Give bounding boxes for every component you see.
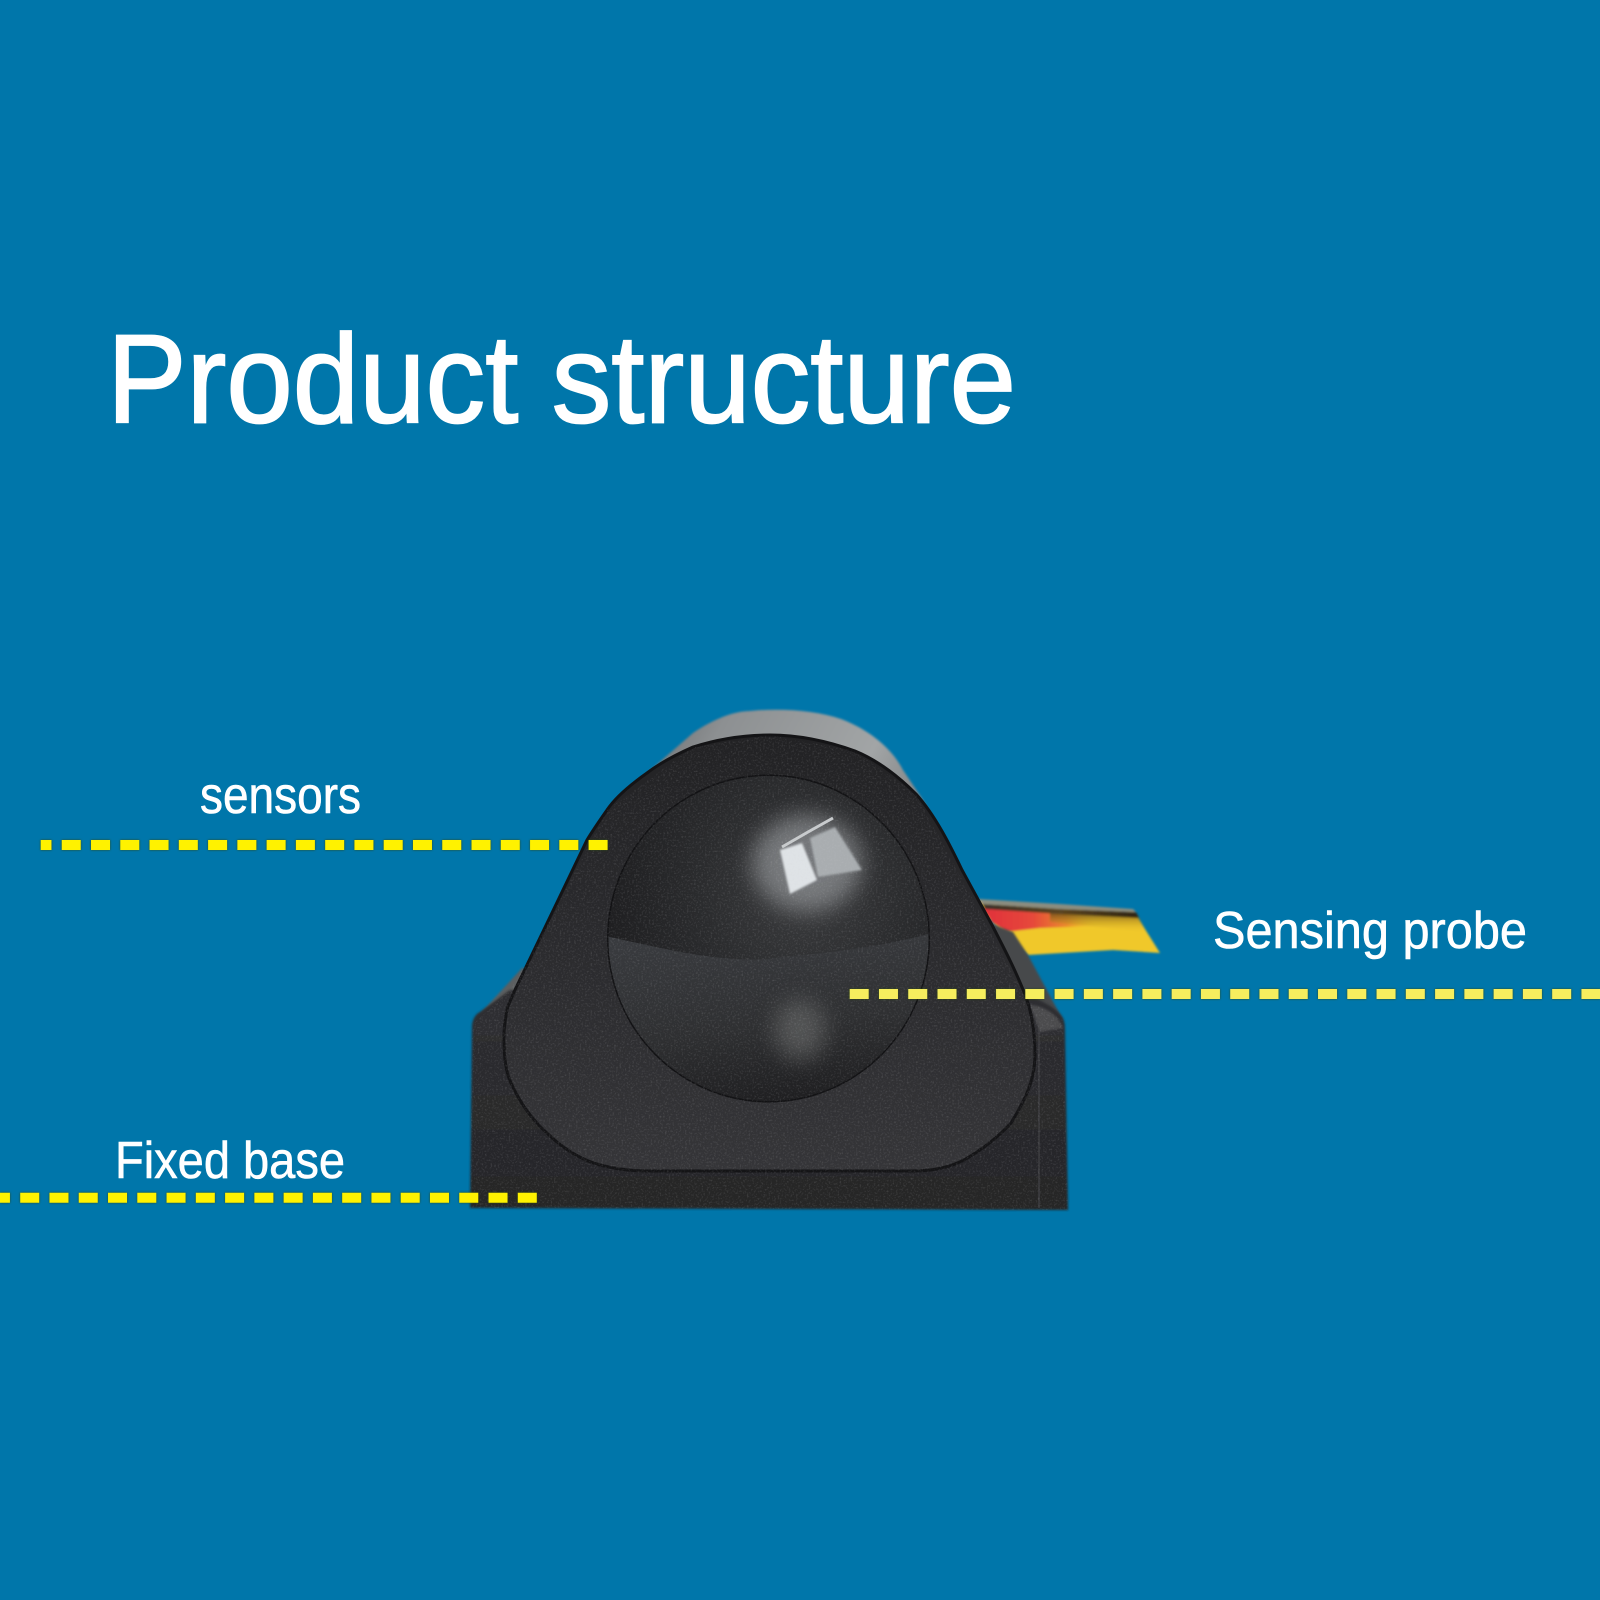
left shoulder: [477, 967, 535, 1030]
base top-right corner: [1030, 1005, 1063, 1032]
sensor dome: [600, 770, 940, 1110]
soft reflection: [774, 1000, 826, 1060]
product photo: sensor device: [470, 710, 1160, 1210]
wire bundle: [978, 899, 1160, 955]
callout line: fixed base: [0, 1193, 537, 1203]
rear housing: [607, 710, 985, 915]
callout line: sensing probe: [850, 989, 1600, 999]
label: sensing probe: Sensing probe: [1213, 902, 1527, 960]
callout line: sensors: [41, 840, 608, 850]
fixed base body: [470, 990, 1068, 1210]
right side panel: [975, 897, 1063, 1030]
surface grain: [470, 735, 1068, 1210]
highlight glow: [752, 815, 862, 911]
bright highlight facet: [780, 843, 817, 894]
base right edge: [1038, 1025, 1040, 1208]
label: fixed base: Fixed base: [115, 1132, 345, 1190]
highlight streak: [782, 818, 833, 847]
right highlight facet: [810, 827, 862, 877]
dome lower half: [608, 934, 928, 1080]
label: sensors: sensors: [200, 767, 361, 825]
title: Product structure: [107, 309, 1016, 450]
dome upper half: [608, 776, 928, 960]
front face: [504, 735, 1035, 1171]
